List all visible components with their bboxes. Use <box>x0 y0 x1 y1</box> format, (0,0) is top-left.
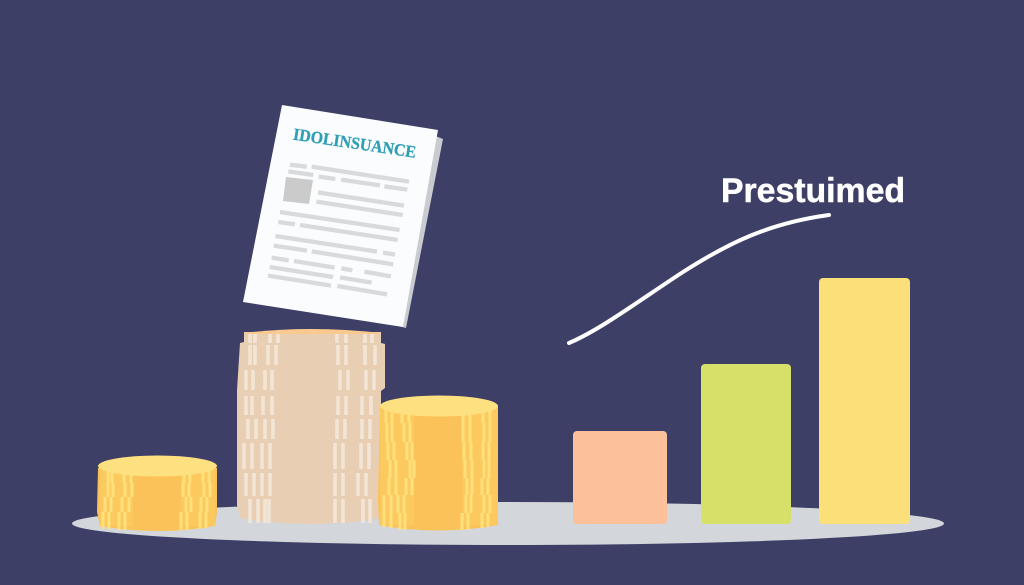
coin stack: right <box>378 396 498 530</box>
insurance document <box>243 105 443 328</box>
bar: peach <box>573 431 667 524</box>
document image placeholder <box>283 177 313 204</box>
document title: IDOLINSUANCE <box>292 125 417 162</box>
chart label: Prestuimed <box>721 172 905 210</box>
trend line <box>569 215 829 343</box>
document page <box>243 105 438 327</box>
document shadow page <box>395 135 443 328</box>
coin top <box>98 456 217 476</box>
bar: green <box>701 364 791 524</box>
bar: yellow <box>819 278 910 524</box>
document text lines <box>268 165 409 294</box>
coin top <box>380 396 498 416</box>
coin stack: tall middle <box>237 329 385 524</box>
bar chart <box>573 278 910 524</box>
coin stack: small left <box>97 456 217 531</box>
ground ellipse <box>72 502 944 545</box>
coin top <box>244 329 381 334</box>
